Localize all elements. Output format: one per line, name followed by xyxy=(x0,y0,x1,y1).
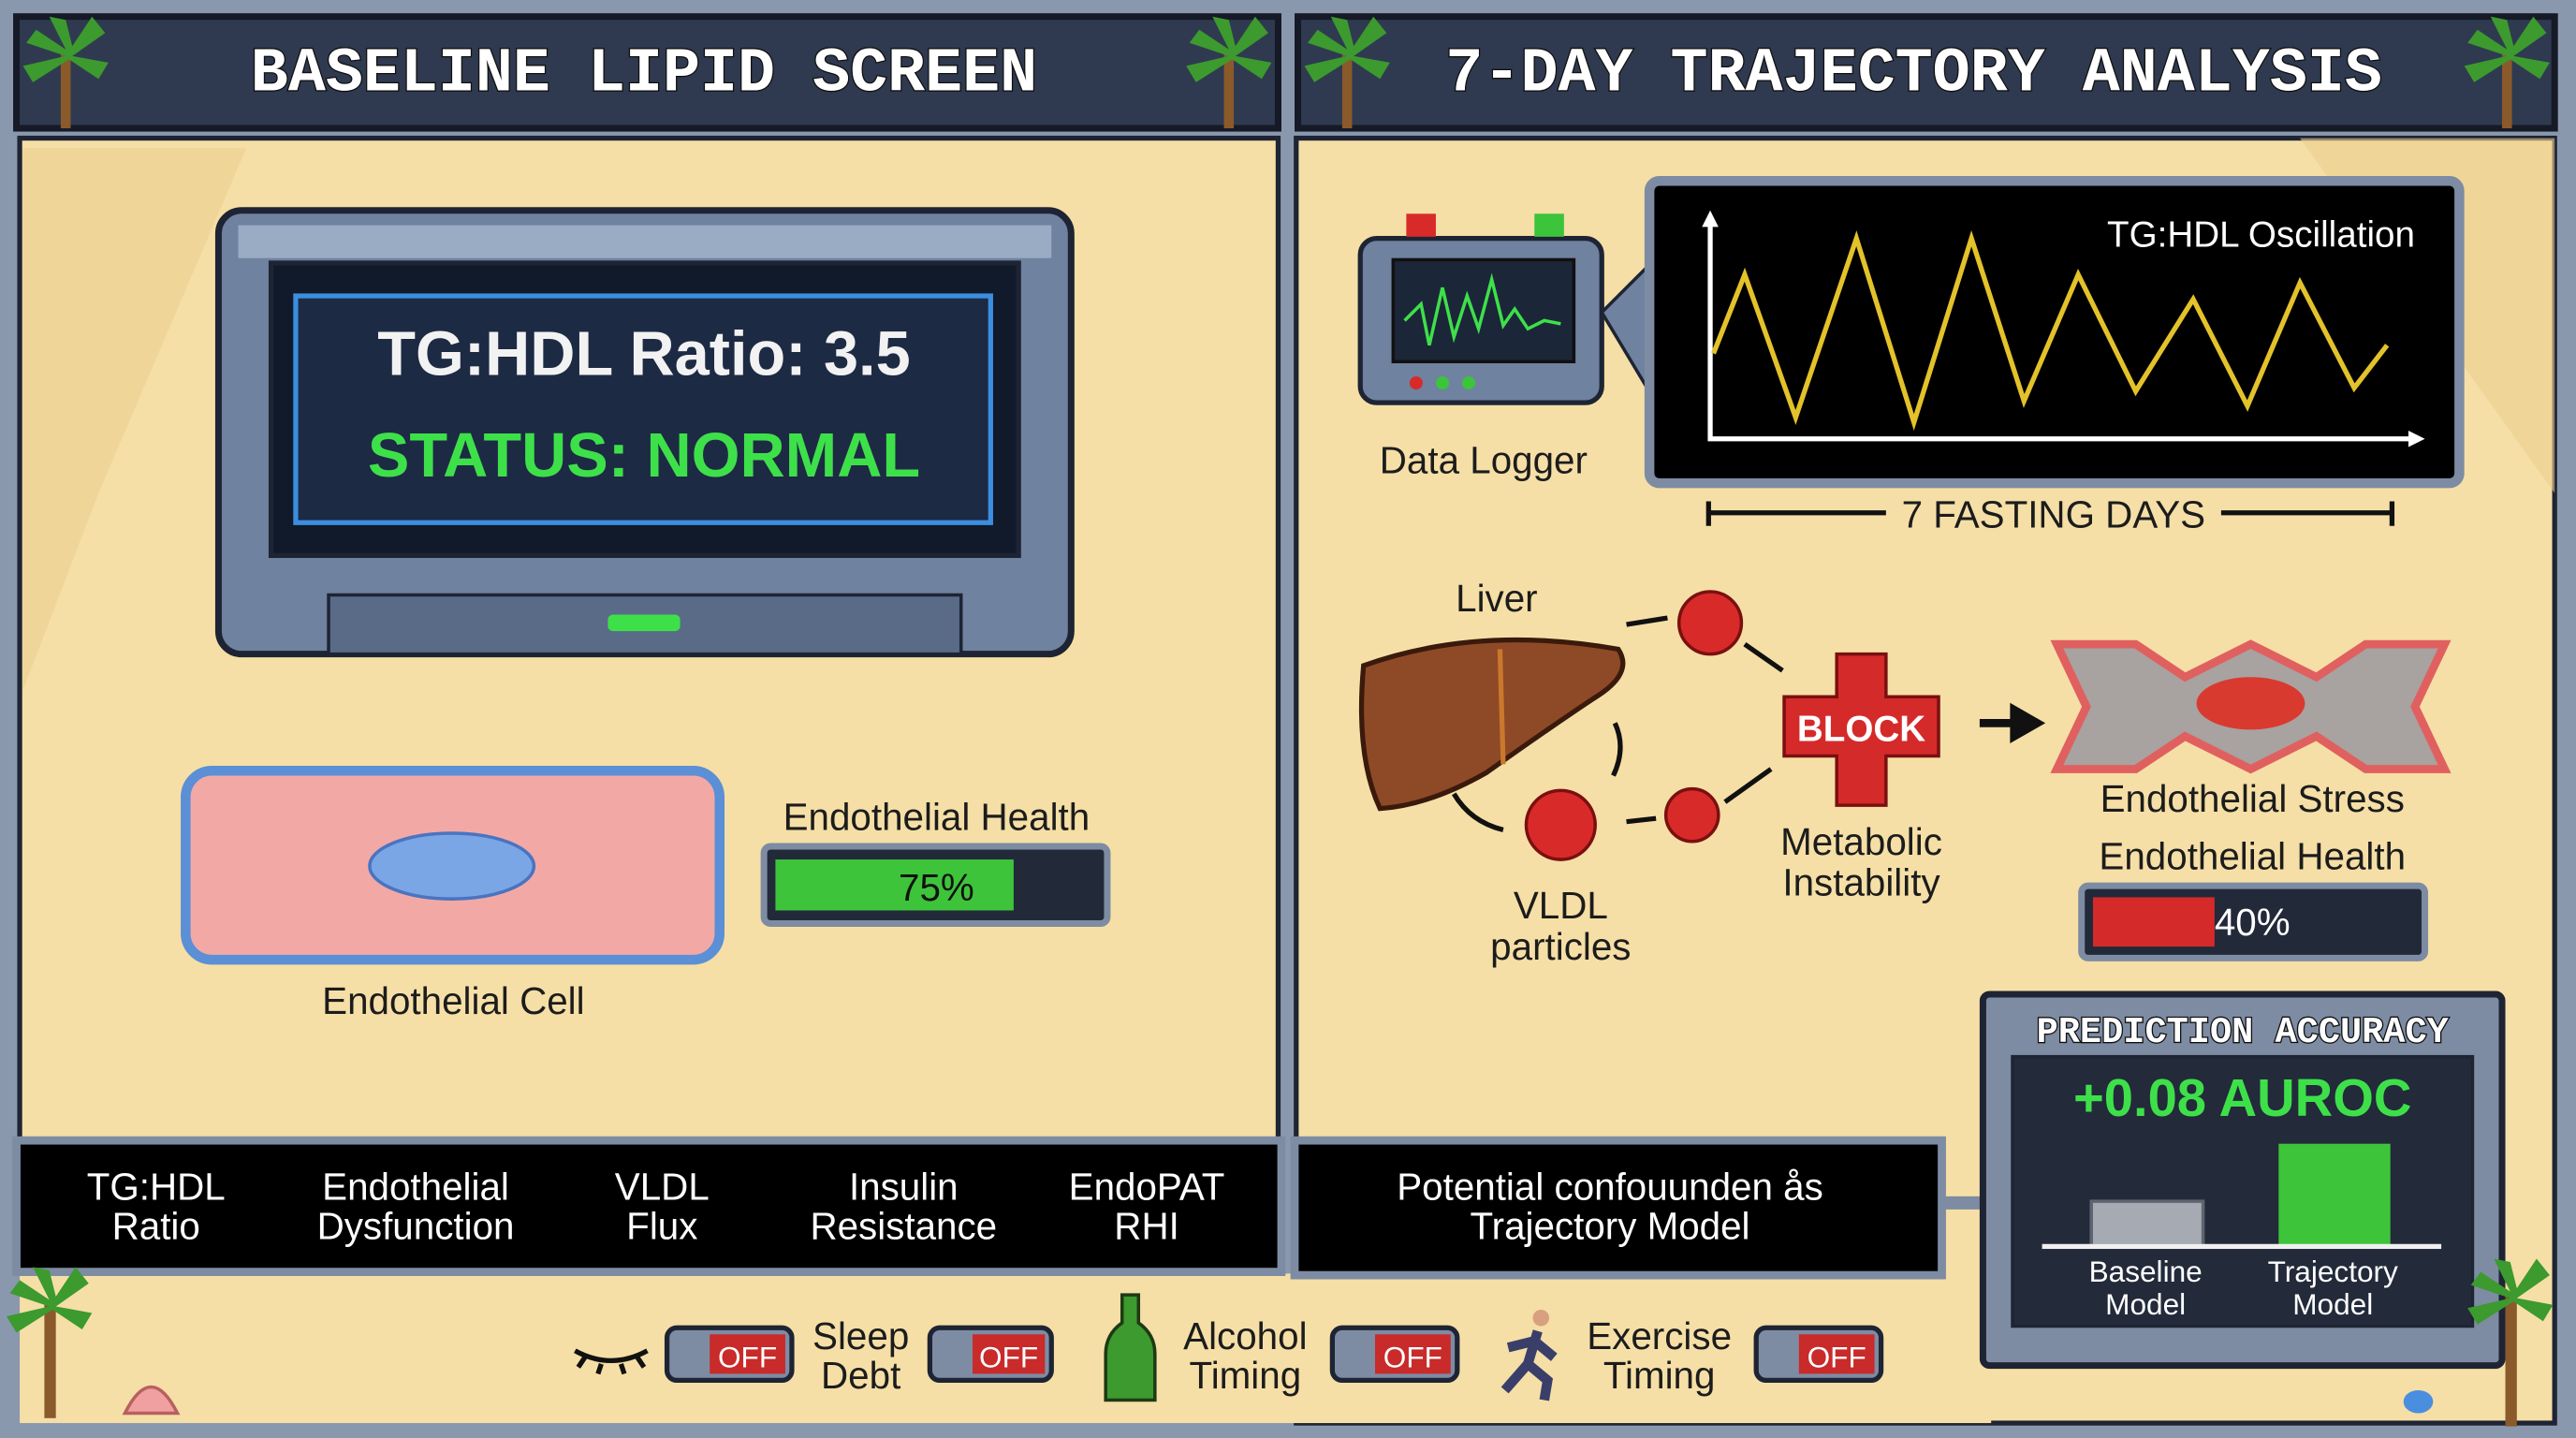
panel: left sand xyxy=(20,139,1278,1140)
title left: BASELINE LIPID SCREEN xyxy=(251,39,1037,110)
arrow to stressed cell xyxy=(1980,710,2037,736)
bar chart: Trajectory xyxy=(2268,1255,2398,1288)
screen text ratio: TG:HDL Ratio: 3.5 xyxy=(377,319,911,389)
icon: stressed endothelial cell xyxy=(2056,644,2445,770)
panel: prediction accuracy: +0.08 AUROC xyxy=(2073,1068,2411,1127)
toggle 3 xyxy=(1332,1328,1457,1380)
header: left xyxy=(17,17,1278,128)
toggle 4: OFF xyxy=(1808,1340,1866,1373)
icon: liver xyxy=(1362,640,1623,809)
toggle 1: OFF xyxy=(718,1340,777,1373)
bottom bar: key terms: Resistance xyxy=(810,1204,997,1247)
icon: shell xyxy=(124,1387,178,1414)
icon: bottle xyxy=(1105,1295,1155,1400)
bracket: 7 fasting days xyxy=(1708,493,2392,536)
device: lipid screen monitor xyxy=(218,211,1071,654)
icon: block cross xyxy=(1784,654,1939,805)
panel: prediction accuracy xyxy=(1983,994,2502,1366)
box: confounders xyxy=(1295,1140,1942,1275)
toggle 3: OFF xyxy=(1383,1340,1442,1373)
icon: palm header 1 xyxy=(23,17,109,128)
bottom bar: key terms: TG:HDL xyxy=(87,1165,226,1208)
icon: runner xyxy=(1505,1310,1554,1400)
panel: prediction accuracy: PREDICTION ACCURACY xyxy=(2037,1012,2450,1053)
label alcohol timing: Timing xyxy=(1190,1354,1301,1397)
bottom bar: key terms: Flux xyxy=(626,1204,697,1247)
label endothelial stress: Endothelial Stress xyxy=(2100,777,2405,820)
chart: TG:HDL oscillation xyxy=(1649,181,2459,483)
health bar 40% xyxy=(2082,886,2425,958)
bracket: 7 fasting days: 7 FASTING DAYS xyxy=(1902,493,2205,536)
bottom bar: key terms: Endothelial xyxy=(322,1165,509,1208)
toggle 4 xyxy=(1756,1328,1881,1380)
label vldl particles: VLDL xyxy=(1514,884,1608,927)
label alcohol timing: Alcohol xyxy=(1183,1314,1308,1357)
bottom bar: key terms: RHI xyxy=(1114,1204,1179,1247)
label endothelial cell: Endothelial Cell xyxy=(322,979,585,1022)
box: confounders: Potential confouunden ås xyxy=(1397,1165,1823,1208)
health bar 40%: 40% xyxy=(2215,901,2291,944)
icon: palm bottom right xyxy=(2467,1259,2553,1427)
label data logger: Data Logger xyxy=(1380,439,1588,482)
health bar 75%: 75% xyxy=(899,866,974,909)
panel: right sand xyxy=(1296,139,2554,1423)
label exercise timing: Timing xyxy=(1603,1354,1715,1397)
label sleep debt: Debt xyxy=(821,1354,900,1397)
endothelial cell xyxy=(185,770,720,960)
chart: TG:HDL oscillation: TG:HDL Oscillation xyxy=(2107,214,2415,255)
bottom bar: key terms: Dysfunction xyxy=(317,1204,514,1247)
label vldl particles: particles xyxy=(1490,925,1631,968)
bottom bar: key terms: Ratio xyxy=(112,1204,200,1247)
bottom bar: key terms: VLDL xyxy=(615,1165,710,1208)
title right: 7-DAY TRAJECTORY ANALYSIS xyxy=(1445,39,2382,110)
bar chart xyxy=(2042,1144,2441,1321)
icon: palm header 3 xyxy=(1305,17,1390,128)
bottom bar: key terms: EndoPAT xyxy=(1069,1165,1224,1208)
bottom bar: key terms: Insulin xyxy=(849,1165,959,1208)
health bar 75% xyxy=(764,846,1107,924)
toggle 2: OFF xyxy=(979,1340,1038,1373)
connector xyxy=(1942,1196,1984,1210)
label metabolic instability: Instability xyxy=(1782,861,1940,904)
icon: palm header 2 xyxy=(1186,17,1271,128)
icon: sleep eye xyxy=(575,1351,648,1373)
screen text status: STATUS: NORMAL xyxy=(368,421,920,491)
panel: bottom sand strip xyxy=(20,1273,1991,1423)
icon: block cross: BLOCK xyxy=(1797,710,1925,750)
label metabolic instability: Metabolic xyxy=(1780,820,1942,863)
bar chart: Model xyxy=(2292,1287,2373,1321)
icon: palm header 4 xyxy=(2465,17,2550,128)
toggle 2 xyxy=(929,1328,1051,1380)
vldl particles and arrows xyxy=(1454,592,1782,859)
bar chart: Model xyxy=(2105,1287,2186,1321)
label liver: Liver xyxy=(1456,577,1538,620)
label sleep debt: Sleep xyxy=(812,1314,909,1357)
label endothelial health right: Endothelial Health xyxy=(2099,835,2406,878)
label endothelial health: Endothelial Health xyxy=(783,795,1090,838)
box: confounders: Trajectory Model xyxy=(1470,1204,1750,1247)
bar chart: Baseline xyxy=(2089,1255,2203,1288)
data logger icon xyxy=(1360,213,1651,403)
bottom bar: key terms xyxy=(17,1140,1281,1272)
icon: palm bottom left xyxy=(7,1267,92,1418)
label exercise timing: Exercise xyxy=(1587,1314,1732,1357)
header: right xyxy=(1298,17,2554,128)
toggle 1 xyxy=(667,1328,792,1380)
icon: blue gem xyxy=(2404,1390,2433,1414)
